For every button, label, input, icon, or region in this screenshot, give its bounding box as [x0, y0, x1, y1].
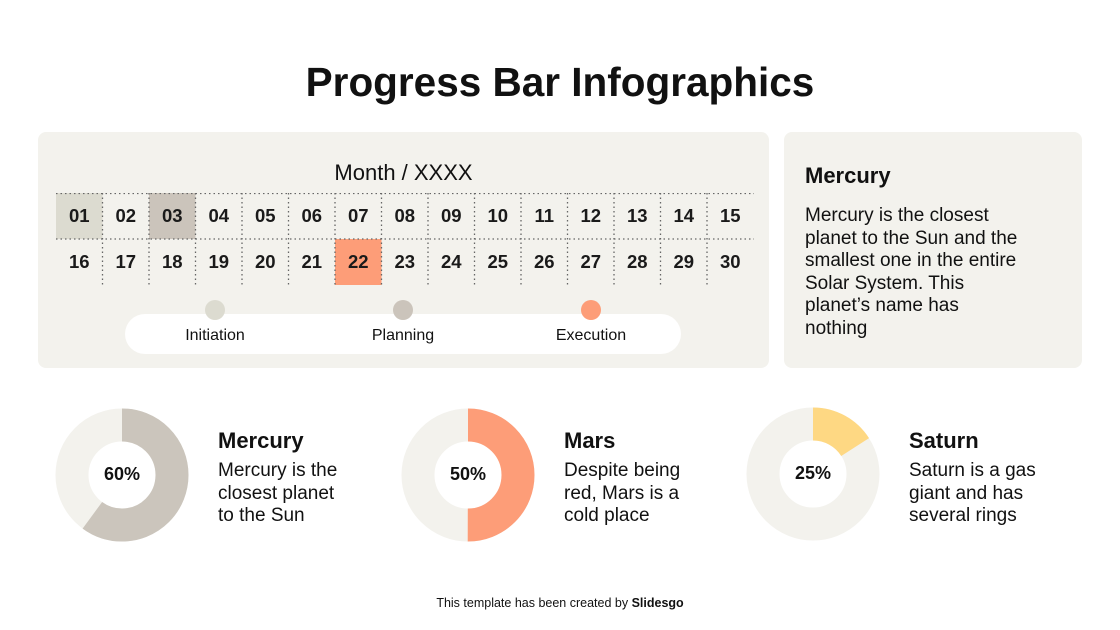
legend: initiation: Initiation: [185, 327, 245, 344]
calendar grid: 04: [208, 205, 229, 226]
calendar grid: 03: [162, 205, 183, 226]
text: mercury: closest planet: [218, 482, 334, 504]
calendar grid: 05: [255, 205, 276, 226]
legend: [125, 300, 681, 354]
calendar grid: 21: [301, 251, 322, 272]
calendar grid: 02: [115, 205, 136, 226]
calendar grid: 14: [673, 205, 694, 226]
text: nothing: [805, 318, 867, 338]
text: mars: [564, 428, 680, 526]
donut: mercury 60%: [56, 408, 188, 542]
calendar grid: 12: [580, 205, 601, 226]
calendar grid: 11: [534, 205, 554, 226]
text: planet to the Sun and the: [805, 228, 1017, 248]
legend: initiation: [185, 300, 245, 344]
legend: planning: Planning: [372, 327, 434, 344]
text: mercury: to the Sun: [218, 505, 305, 526]
text: Mercury is the closest: [805, 205, 989, 226]
calendar grid: 22: [348, 251, 369, 272]
text: saturn: [909, 428, 1036, 526]
calendar grid: 30: [720, 251, 741, 272]
calendar grid: 17: [115, 251, 136, 272]
calendar grid: 24: [441, 251, 462, 272]
text: mars: red, Mars is a: [564, 482, 679, 504]
text: saturn: several rings: [909, 505, 1017, 526]
donut: mars 50%: 50%: [450, 464, 486, 484]
text: mars: Despite being: [564, 460, 680, 481]
text: mercury: [218, 428, 337, 526]
calendar grid: 09: [441, 205, 462, 226]
calendar grid: 10: [487, 205, 508, 226]
heading: Mercury: [805, 163, 891, 188]
text: saturn: giant and has: [909, 482, 1023, 504]
calendar grid: 20: [255, 251, 276, 272]
title: Progress Bar Infographics: [306, 59, 814, 105]
legend: execution: Execution: [556, 327, 626, 344]
calendar grid: 13: [627, 205, 648, 226]
text: saturn: Saturn is a gas: [909, 460, 1036, 481]
text: Solar System. This: [805, 272, 964, 294]
legend: planning: [372, 300, 434, 344]
calendar grid: 06: [301, 205, 322, 226]
text: mars: Mars: [564, 428, 615, 453]
calendar grid: 16: [69, 251, 90, 272]
calendar grid: 25: [487, 251, 508, 272]
text: mercury: Mercury is the: [218, 460, 337, 481]
calendar grid: [56, 193, 754, 285]
calendar grid: 27: [580, 251, 601, 272]
donut: mercury 60%: 60%: [104, 464, 140, 484]
donut: saturn 25%: 25%: [795, 463, 831, 483]
calendar grid: 23: [394, 251, 415, 272]
donut: saturn 25%: [746, 408, 880, 540]
calendar grid: 08: [394, 205, 415, 226]
panel: calendar: [38, 132, 769, 368]
text: mercury: Mercury: [218, 428, 304, 453]
footer credit: This template has been created by Slidesgo: [436, 596, 684, 610]
text: planet’s name has: [805, 295, 959, 316]
legend: execution: [556, 300, 626, 344]
calendar grid: 18: [162, 251, 183, 272]
calendar grid: 15: [720, 205, 741, 226]
text: smallest one in the entire: [805, 250, 1016, 271]
month heading: Month / XXXX: [334, 160, 473, 185]
donut: mars 50%: [402, 408, 534, 542]
text: mars: cold place: [564, 505, 650, 526]
calendar grid: 07: [348, 205, 369, 226]
calendar grid: 19: [208, 251, 229, 272]
calendar grid: 01: [69, 205, 90, 226]
calendar grid: 28: [627, 251, 648, 272]
text: [805, 205, 1017, 338]
calendar grid: 26: [534, 251, 555, 272]
text: saturn: Saturn: [909, 428, 979, 453]
panel: mercury description: [784, 132, 1082, 368]
calendar grid: 29: [673, 251, 694, 272]
